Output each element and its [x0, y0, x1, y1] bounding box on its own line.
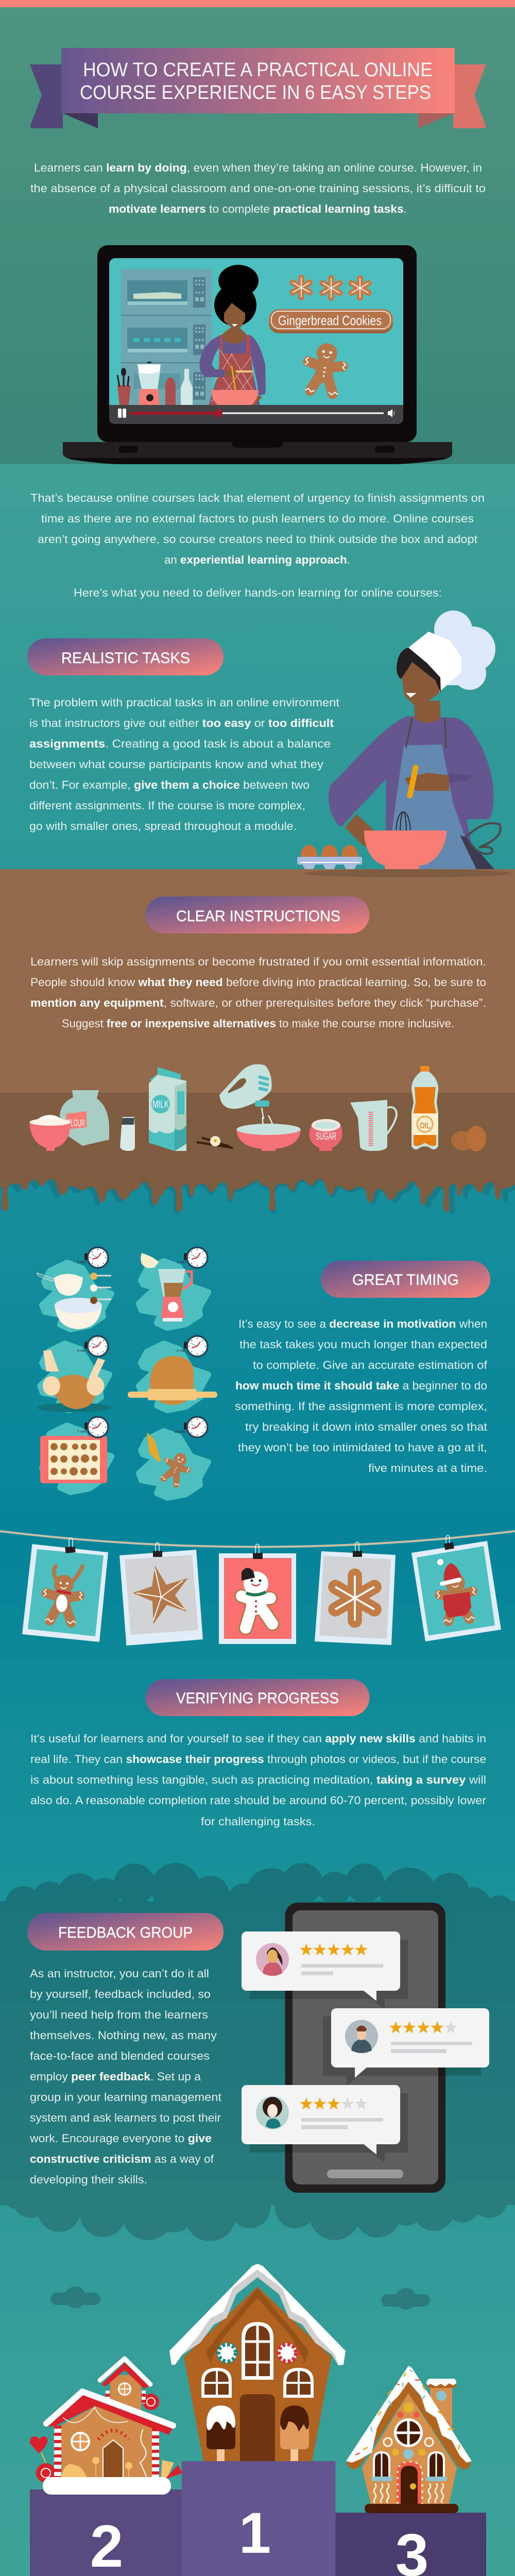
podium step 1: 1 — [239, 2501, 271, 2565]
paragraph: great timing — [235, 1317, 488, 1475]
paragraph: realistic tasks: different assignments. If the course is more complex, — [29, 799, 305, 812]
paragraph: urgency: an experiential learning approach. — [164, 553, 350, 566]
paragraph: clear instructions: Suggest free or inexpensive alternatives to make the course more inclusive. — [62, 1017, 454, 1030]
paragraph: feedback group: developing their skills. — [30, 2173, 147, 2186]
podium step 1 — [182, 2461, 336, 2576]
right house decorations — [384, 2402, 433, 2459]
milk carton — [149, 1067, 186, 1151]
paragraph: realistic tasks: The problem with practical tasks in an online environment — [29, 696, 339, 709]
paragraph: verifying progress — [30, 1732, 486, 1828]
tablet with reviews — [242, 1903, 489, 2193]
paragraph: great timing: to complete. Give an accurate estimation of — [253, 1359, 488, 1371]
paragraph: great timing: five minutes at a time. — [368, 1462, 487, 1475]
review card 2 — [323, 2008, 489, 2086]
paragraph: verifying progress: for challenging tasks. — [201, 1815, 315, 1828]
paragraph: feedback group: face-to-face and blended courses — [30, 2049, 210, 2062]
paragraph: realistic tasks: between what course participants know and what they — [29, 758, 323, 771]
step 6: decorating — [139, 1417, 208, 1498]
paragraph: clear instructions — [30, 955, 486, 1030]
paragraph: realistic tasks: go with smaller ones, spread throughout a module. — [29, 820, 297, 833]
step 5: cookie tray — [40, 1417, 111, 1492]
icon: gingerbread man — [301, 341, 348, 396]
flour bag: FLOUR — [67, 1118, 85, 1128]
step 1: sift and mix: 5 min — [77, 1261, 86, 1264]
baking steps with clocks — [37, 1247, 214, 1498]
step 3: kneading dough — [37, 1336, 111, 1412]
pill heading: Great Timing: GREAT TIMING — [352, 1272, 459, 1289]
pill heading: Verifying Progress — [145, 1679, 370, 1716]
paragraph: urgency — [30, 492, 485, 599]
intro paragraph: the absence of a physical classroom and one-on-one training sessions, it’s difficult to — [30, 182, 486, 195]
oil bottle — [411, 1066, 438, 1149]
photo: snowflake cookie — [315, 1542, 396, 1645]
milk carton: MILK — [152, 1099, 169, 1110]
paragraph: urgency: aren’t going anywhere, so course creators need to think outside the box and adopt — [38, 533, 477, 546]
clothesline — [0, 1531, 515, 1547]
paragraph: great timing: something. If the assignment is more complex, — [235, 1400, 487, 1413]
paragraph: verifying progress: is about something less tangible, such as practicing meditation, taking a survey will — [30, 1773, 486, 1786]
mixing bowl — [364, 831, 447, 869]
photo: reindeer cookie — [22, 1538, 108, 1642]
paragraph: realistic tasks — [29, 696, 339, 833]
paragraph: urgency: That’s because online courses lack that element of urgency to finish assignments on — [30, 492, 485, 504]
pill heading: Clear Instructions — [145, 896, 370, 934]
paragraph: great timing: how much time it should take a beginner to do — [235, 1379, 487, 1392]
chef hat — [408, 611, 495, 692]
left house columns — [58, 2426, 156, 2478]
paragraph: urgency: Here’s what you need to deliver hands-on learning for online courses: — [74, 586, 442, 599]
podium step 3 — [336, 2513, 486, 2576]
left house body — [61, 2406, 153, 2481]
step 2: blender — [139, 1247, 208, 1328]
podium — [30, 2461, 486, 2576]
photo: snowman cookie — [219, 1544, 296, 1644]
salt shaker — [120, 1117, 135, 1151]
paragraph: clear instructions: mention any equipment , software, or other prerequisites before they click “purchase”. — [30, 996, 486, 1009]
title ribbon: COURSE EXPERIENCE IN 6 EASY STEPS — [80, 82, 431, 104]
paragraph: clear instructions: People should know what they need before diving into practical learning. So, be sure to — [30, 976, 486, 989]
sign: Gingerbread Cookies: Gingerbread Cookies — [278, 313, 382, 328]
brown eggs — [451, 1126, 486, 1151]
bowl of flour — [29, 1115, 71, 1151]
ovens — [121, 269, 212, 405]
ingredients row — [29, 1064, 486, 1151]
step 6: decorating: 15 min — [175, 1430, 185, 1434]
paragraph: great timing: they won’t be too intimidated to have a go at it, — [238, 1441, 487, 1454]
video control bar — [109, 405, 403, 424]
title ribbon — [30, 48, 486, 128]
paragraph: feedback group — [29, 1967, 221, 2186]
paragraph: urgency: time as there are no external factors to push learners to do more. Online courses — [41, 512, 474, 525]
paragraph: great timing: try breaking it down into smaller ones so that — [245, 1420, 487, 1433]
laptop screen — [109, 258, 403, 424]
eggs tray — [297, 845, 362, 869]
laptop illustration — [63, 245, 452, 464]
small cloud left — [50, 2286, 100, 2308]
right house roof — [346, 2366, 472, 2469]
background: intro section — [0, 7, 515, 464]
chef woman illustration — [297, 611, 501, 869]
big pink bowl — [236, 1124, 301, 1151]
pill heading: Verifying Progress: VERIFYING PROGRESS — [176, 1690, 339, 1707]
pill heading: Clear Instructions: CLEAR INSTRUCTIONS — [176, 908, 340, 925]
left house tower — [100, 2359, 150, 2414]
right house base — [365, 2504, 458, 2513]
background: darker brown shelf — [0, 1093, 515, 1179]
center house candies — [217, 2343, 297, 2363]
pill heading: Realistic Tasks: REALISTIC TASKS — [61, 650, 190, 667]
pill heading: Feedback Group: FEEDBACK GROUP — [58, 1924, 193, 1941]
intro paragraph — [30, 161, 486, 215]
paragraph: realistic tasks: is that instructors give out either too easy or too difficult — [29, 717, 334, 730]
paragraph: verifying progress: real life. They can showcase their progress through photos or videos, but if the course — [30, 1753, 486, 1766]
right house door — [397, 2462, 422, 2504]
paragraph: verifying progress: It's useful for learners and for yourself to see if they can apply new skills and habits in — [30, 1732, 486, 1745]
background: teal timing section — [0, 1175, 515, 1906]
photo: star cookie — [119, 1543, 203, 1646]
hand mixer — [219, 1064, 274, 1132]
measuring jug — [350, 1100, 397, 1151]
center house door — [240, 2394, 275, 2461]
paragraph: feedback group: work. Encourage everyone to give — [29, 2132, 212, 2145]
gingerbread house 1 (center) — [169, 2264, 346, 2461]
step 4: rolling dough: 2 min — [177, 1349, 185, 1353]
small cloud right — [381, 2288, 430, 2310]
tablet body — [285, 1903, 445, 2193]
sugar jar: SUGAR — [316, 1131, 336, 1142]
review card 3 — [242, 2085, 408, 2163]
center house windows — [201, 2322, 314, 2398]
paragraph: great timing: the task takes you much longer than expected — [239, 1338, 487, 1351]
laptop base — [63, 442, 452, 464]
left house roof — [46, 2392, 173, 2435]
podium step 2 — [30, 2489, 182, 2576]
paragraph: realistic tasks: assignments . Creating a good task is about a balance — [29, 737, 331, 750]
intro paragraph: Learners can learn by doing , even when they’re taking an online course. However, in — [34, 161, 482, 174]
paragraph: feedback group: employ peer feedback . Set up a — [30, 2070, 201, 2083]
pill heading: Feedback Group — [27, 1913, 224, 1951]
right house wall — [362, 2393, 457, 2504]
sign: Gingerbread Cookies — [269, 309, 393, 333]
blender, cup and bottles — [117, 362, 193, 405]
chef arms and whisk — [345, 768, 473, 853]
gingerbread house 2 (left) — [30, 2359, 183, 2495]
chef body — [329, 716, 493, 869]
left house yard decorations — [61, 2457, 183, 2481]
paragraph: realistic tasks: don’t. For example, give them a choice between two — [29, 778, 310, 791]
vanilla — [197, 1136, 233, 1148]
left house decorations behind — [30, 2394, 159, 2483]
paragraph: feedback group: As an instructor, you can’t do it all — [30, 1967, 209, 1980]
step 2: blender: 1 min — [177, 1261, 185, 1264]
step 4: rolling dough — [131, 1336, 214, 1410]
review card 1 — [242, 1931, 408, 2009]
chef apron straps and bow — [406, 718, 501, 869]
paragraph: verifying progress: also do. A reasonable completion rate should be around 60-70 percent, possibly lower — [30, 1794, 486, 1807]
step 1: sift and mix — [37, 1247, 111, 1329]
paragraph: clear instructions: Learners will skip assignments or become frustrated if you omit essential information. — [30, 955, 486, 968]
pill heading: Realistic Tasks — [27, 638, 224, 675]
background: lower teal section — [0, 2195, 515, 2576]
paragraph: feedback group: group in your learning management — [30, 2091, 221, 2104]
center house popsicles — [207, 2405, 309, 2461]
laptop bezel — [97, 245, 417, 442]
step 3: kneading dough: 5 min — [77, 1349, 86, 1353]
cloud panel: feedback group background — [0, 1863, 515, 2241]
gingerbread house 3 (right) — [346, 2366, 472, 2513]
left house window and door — [71, 2429, 147, 2480]
paragraph: feedback group: system and ask learners to post their — [30, 2111, 221, 2124]
paragraph: great timing: It’s easy to see a decrease in motivation when — [238, 1317, 487, 1330]
oil bottle: OIL — [420, 1122, 430, 1130]
paragraph: feedback group: constructive criticism as a way of — [30, 2153, 214, 2165]
top accent bar — [0, 0, 515, 7]
pill heading: Great Timing — [321, 1261, 490, 1298]
left house snow base — [43, 2477, 171, 2495]
flour bag — [60, 1090, 109, 1146]
background: teal section — [0, 464, 515, 869]
chef apron — [387, 744, 476, 869]
step 5: cookie tray: 7 min — [77, 1430, 86, 1434]
chocolate drips — [0, 1170, 515, 1214]
baker woman — [200, 265, 266, 405]
chef head — [397, 648, 441, 723]
background: brown table section — [0, 869, 515, 1093]
paragraph: feedback group: you’ll need help from the learners — [30, 2008, 208, 2021]
intro paragraph: motivate learners to complete practical learning tasks . — [109, 202, 407, 215]
sugar jar — [309, 1119, 342, 1151]
paragraph: feedback group: themselves. Nothing new, as many — [30, 2029, 217, 2042]
icon: snowflake cookies — [293, 278, 369, 298]
title ribbon: HOW TO CREATE A PRACTICAL ONLINE — [83, 59, 433, 81]
right house chimney — [426, 2379, 456, 2429]
paragraph: feedback group: by yourself, feedback included, so — [30, 1988, 211, 2001]
right house windows — [371, 2451, 447, 2503]
photo: santa cookie — [411, 1535, 501, 1641]
table shadow — [305, 869, 511, 877]
